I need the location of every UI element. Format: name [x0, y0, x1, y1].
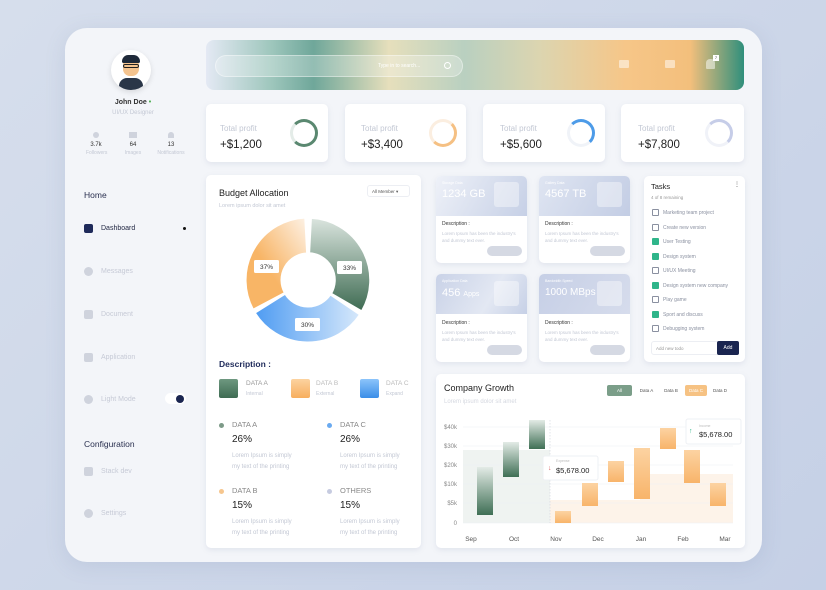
task list: Sport and discuss: [663, 312, 703, 318]
callout: expense: [543, 456, 598, 480]
task list: Debugging system: [663, 326, 704, 332]
profit card 3: [483, 104, 605, 162]
task list: UI/UX Meeting: [663, 268, 696, 274]
storage card: 456 Apps: [436, 274, 527, 362]
stat: data B: DATA B: [232, 486, 258, 495]
storage card: 1234 GB: Storage Data: [442, 181, 463, 185]
filter buttons: Data A: [640, 388, 653, 393]
bar chart: Oct: [509, 536, 519, 543]
task list: Play game: [663, 297, 687, 303]
header banner: [206, 40, 744, 90]
bar chart: Dec: [592, 536, 605, 543]
stat: data A: DATA A: [232, 420, 257, 429]
add todo input: Add: [724, 345, 732, 351]
menu: stack dev: Stack dev: [101, 468, 132, 475]
donut chart: [246, 218, 370, 342]
bar chart: Nov: [550, 536, 563, 543]
bar chart: Mar: [719, 536, 731, 543]
profit card 1: [206, 104, 328, 162]
panel: budget allocation: Expand: [386, 391, 403, 397]
storage card: 1234 GB: 1234 GB: [442, 188, 485, 200]
name: John Doe •: [115, 99, 151, 106]
bar chart: $20k: [444, 463, 458, 469]
task list: Marketing team project: [663, 210, 714, 216]
stat: data C: Lorem Ipsum is simply: [340, 453, 400, 459]
storage card: 4567 TB: 4567 TB: [545, 188, 586, 200]
toggle: [165, 393, 186, 404]
filter buttons: All: [617, 388, 622, 393]
storage card: 1000 MBps: [539, 274, 630, 362]
text: ⋮: [734, 182, 740, 188]
menu: settings: [84, 509, 126, 518]
stat: data B: Lorem Ipsum is simply: [232, 519, 292, 525]
stats: [86, 132, 185, 156]
text: 4 of 8 remaining: [651, 195, 683, 200]
storage card: 1000 MBps: and dummy text ever.: [545, 337, 588, 342]
profit card 4: [621, 104, 744, 162]
add todo input: [651, 341, 738, 355]
callout: income: ↑: [689, 428, 692, 435]
bar chart: $10k: [444, 482, 458, 488]
callout: expense: Expense: [556, 459, 570, 463]
menu: application: [84, 353, 135, 362]
donut chart: 33%: [343, 265, 356, 272]
stats: 13: [168, 142, 174, 148]
stat: data C: my text of the printing: [340, 464, 397, 470]
profit card 3: +$5,600: [500, 139, 542, 151]
panel: budget allocation: [206, 175, 421, 548]
task list: [652, 209, 728, 332]
sidebar profile: [86, 50, 185, 156]
storage card: 456 Apps: 456 Apps: [442, 287, 479, 299]
storage card: 456 Apps: Lorem Ipsum has been the industry's: [442, 330, 516, 335]
task list: User Testing: [663, 239, 691, 245]
stat: others: [327, 486, 400, 536]
profit card 1: +$1,200: [220, 139, 262, 151]
stats: Images: [125, 150, 141, 156]
stat: data B: [219, 486, 292, 536]
callout: income: Income: [699, 424, 711, 428]
bar chart: Sep: [465, 536, 477, 543]
stat: data B: 15%: [232, 500, 252, 511]
task list: Design system new company: [663, 283, 728, 289]
storage card: 4567 TB: and dummy text ever.: [545, 238, 588, 243]
stat: data A: my text of the printing: [232, 464, 289, 470]
storage card: 4567 TB: Gallery Data: [545, 181, 564, 185]
stat: data B: my text of the printing: [232, 530, 289, 536]
menu: dashboard: Dashboard: [101, 225, 135, 232]
text: Lorem ipsum dolor sit amet: [444, 399, 516, 405]
bar chart: 0: [454, 521, 458, 527]
menu: messages: [84, 267, 133, 276]
callout: expense: ↓: [548, 465, 552, 472]
menu: messages: Messages: [101, 268, 133, 275]
menu: stack dev: [84, 467, 132, 476]
storage card: 1000 MBps: Bandwidth Speed: [545, 279, 572, 283]
icon: avatar: [111, 50, 151, 90]
header banner: 7: [715, 55, 717, 60]
main container: [65, 28, 762, 562]
dropdown: All Member ▾: [372, 189, 398, 194]
bar chart: $5k: [447, 501, 458, 507]
heading: Budget Allocation: [219, 188, 289, 198]
search bar: Type in to search...: [378, 63, 420, 69]
bar chart: Jan: [636, 536, 647, 543]
storage card: 1234 GB: Description :: [442, 221, 470, 227]
stat: data A: [219, 420, 292, 470]
stat: data C: 26%: [340, 434, 360, 445]
menu: settings: Settings: [101, 510, 126, 517]
stat: data A: Lorem Ipsum is simply: [232, 453, 292, 459]
menu: document: Document: [101, 311, 133, 318]
panel: budget allocation: DATA B: [316, 380, 338, 387]
menu: document: [84, 310, 133, 319]
stat: others: Lorem Ipsum is simply: [340, 519, 400, 525]
storage card: 456 Apps: and dummy text ever.: [442, 337, 485, 342]
panel: budget allocation: External: [316, 391, 334, 397]
storage card: 456 Apps: Description :: [442, 320, 470, 326]
text: Company Growth: [444, 383, 514, 393]
stats: Notifications: [157, 150, 185, 156]
filter buttons: Data B: [664, 388, 678, 393]
profit card 2: Total profit: [361, 124, 398, 133]
panel: tasks: [644, 176, 745, 362]
heading: configuration: Configuration: [84, 439, 135, 449]
panel: budget allocation: DATA C: [386, 380, 409, 387]
menu: dashboard: [84, 224, 186, 233]
storage card: 4567 TB: [539, 176, 630, 263]
storage card: 1234 GB: Lorem Ipsum has been the industry's: [442, 231, 516, 236]
stat: data C: DATA C: [340, 420, 366, 429]
filter buttons: Data C: [689, 388, 703, 393]
storage card: 1234 GB: [436, 176, 527, 263]
icons: [619, 60, 629, 68]
menu: light mode: Light Mode: [101, 396, 136, 403]
search bar: [215, 55, 463, 77]
profit card 3: Total profit: [500, 124, 537, 133]
storage card: 456 Apps: Application Data: [442, 279, 468, 283]
bar chart: $40k: [444, 425, 458, 431]
menu: light mode: [84, 395, 136, 404]
legend icons: [219, 379, 238, 398]
stats: 3.7k: [90, 142, 102, 148]
dropdown: [367, 185, 410, 197]
storage card: 1000 MBps: Description :: [545, 320, 573, 326]
callout: income: [686, 419, 741, 444]
donut chart: 30%: [301, 322, 314, 329]
stats: 64: [130, 142, 136, 148]
heading: Home: Home: [84, 190, 107, 200]
storage card: 1000 MBps: 1000 MBps: [545, 287, 596, 298]
bar chart: [444, 420, 733, 543]
callout: expense: $5,678.00: [556, 466, 589, 475]
storage card: 1000 MBps: Lorem Ipsum has been the industry's: [545, 330, 619, 335]
task list: Design system: [663, 254, 696, 260]
add todo input: Add new todo: [656, 346, 684, 351]
storage card: 4567 TB: Lorem Ipsum has been the industry's: [545, 231, 619, 236]
stat: others: 15%: [340, 500, 360, 511]
stats: Followers: [86, 150, 107, 156]
profit card 4: +$7,800: [638, 139, 680, 151]
profit card 1: Total profit: [220, 124, 257, 133]
heading: description: Description :: [219, 359, 271, 369]
donut chart: 37%: [260, 264, 273, 271]
role: UI/UX Designer: [112, 110, 154, 116]
bar chart: Feb: [677, 536, 689, 543]
profit card 2: [345, 104, 466, 162]
stat: others: my text of the printing: [340, 530, 397, 536]
filter buttons: [607, 385, 727, 396]
filter buttons: Data D: [713, 388, 727, 393]
panel: budget allocation: Internal: [246, 391, 263, 397]
profit card 2: +$3,400: [361, 139, 403, 151]
stat: others: OTHERS: [340, 486, 371, 495]
panel: budget allocation: Lorem ipsum dolor sit amet: [219, 203, 285, 209]
storage card: 4567 TB: Description :: [545, 221, 573, 227]
stat: data A: 26%: [232, 434, 252, 445]
profit card 4: Total profit: [638, 124, 675, 133]
task list: Create new version: [663, 225, 706, 231]
storage card: 1234 GB: and dummy text ever.: [442, 238, 485, 243]
stat: data C: [327, 420, 400, 470]
menu: application: Application: [101, 354, 135, 361]
panel: company growth: [436, 374, 745, 548]
bar chart: $30k: [444, 444, 458, 450]
text: Tasks: [651, 182, 670, 191]
panel: budget allocation: DATA A: [246, 380, 268, 387]
callout: income: $5,678.00: [699, 430, 732, 439]
